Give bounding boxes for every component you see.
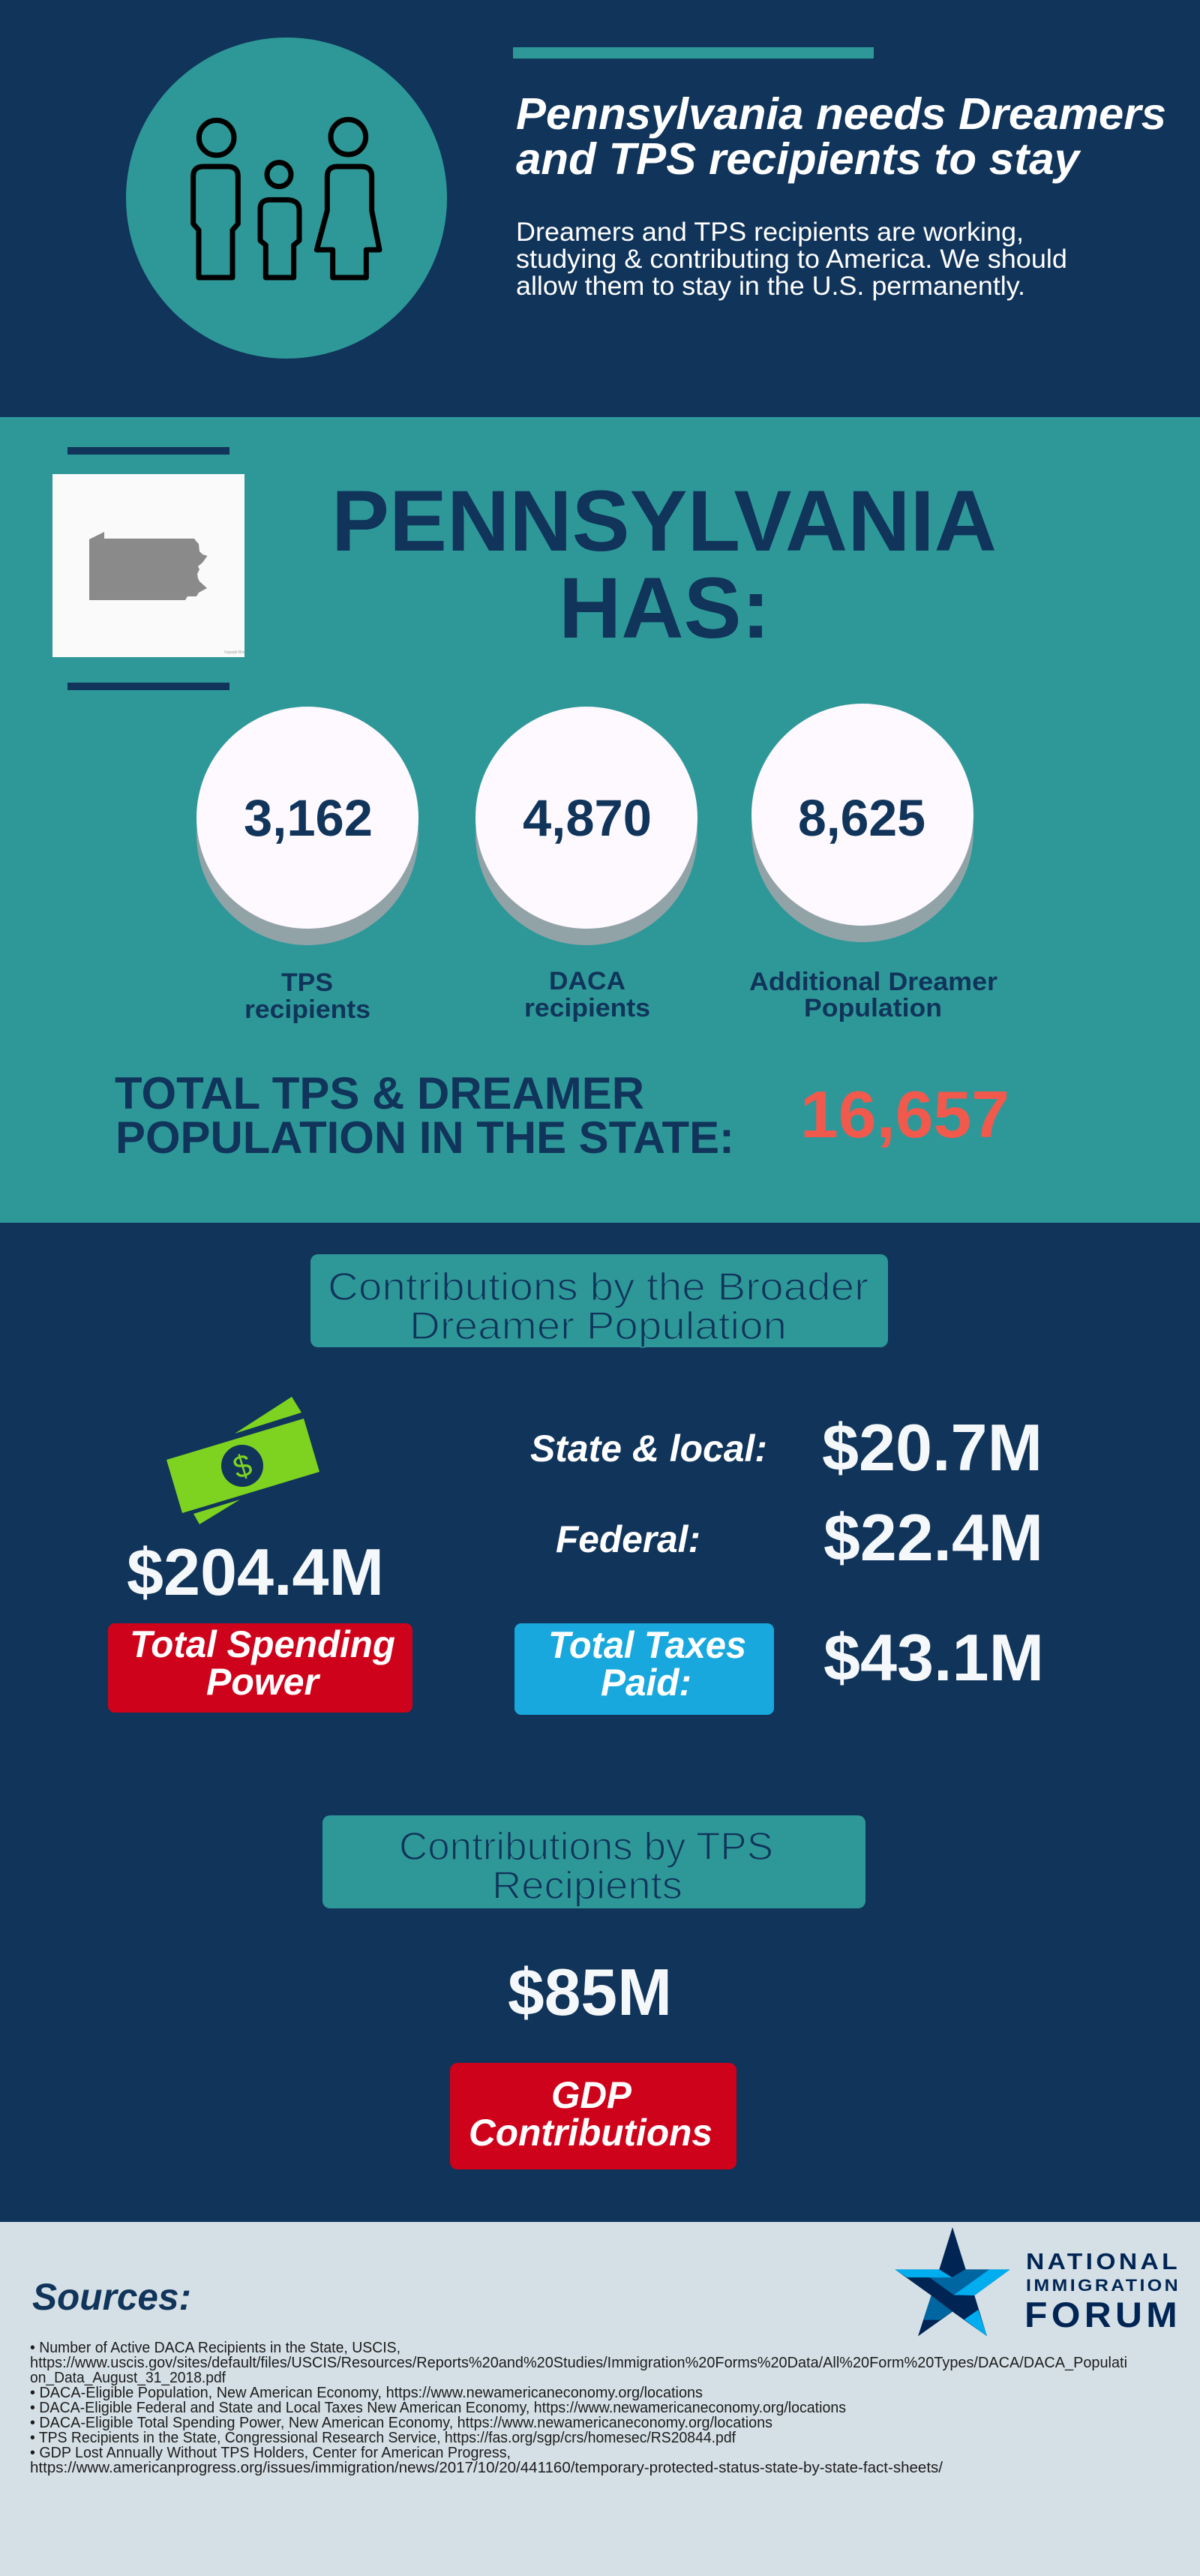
stat: total taxes paid [514, 1620, 1044, 1715]
total population label: POPULATION IN THE STATE: [116, 1112, 734, 1163]
stat: federal taxes [556, 1500, 1043, 1575]
logo: National Immigration Forum: NATIONAL [1026, 2248, 1180, 2274]
stat: GDP contributions value: $85M [508, 1955, 672, 2029]
callout: GDP contributions: Contributions [469, 2112, 712, 2154]
stat: total spending power [108, 1535, 412, 1713]
intro text: allow them to stay in the U.S. permanently. [516, 272, 1025, 301]
icon: money bills [166, 1397, 320, 1524]
stat: DACA recipients: recipients [524, 994, 650, 1022]
panel: Pennsylvania population [0, 417, 1200, 1223]
intro text [516, 218, 1067, 301]
icon: money bills: $ [229, 1447, 256, 1485]
icon: Pennsylvania state map [52, 474, 244, 657]
text block: source list: • GDP Lost Annually Without TPS Holders, Center for American Progress, [30, 2445, 511, 2461]
stat: DACA recipients [476, 707, 698, 1022]
text block: source list: • DACA-Eligible Federal and State and Local Taxes New American Economy, https://www.newamericaneconomy.org/locations [30, 2400, 846, 2416]
total population number: 16,657 [800, 1077, 1010, 1151]
heading: Pennsylvania has: HAS: [559, 560, 770, 656]
text block: source list: on_Data_August_31_2018.pdf [30, 2370, 226, 2386]
stat: DACA recipients: 4,870 [523, 789, 652, 847]
intro text: studying & contributing to America. We should [516, 245, 1067, 274]
stat: total taxes paid: $43.1M [824, 1620, 1044, 1695]
stat: total spending power: Total Spending [130, 1623, 395, 1665]
text block: source list [30, 2340, 1127, 2476]
stat: state and local taxes: $20.7M [822, 1410, 1042, 1485]
text block: source list: • DACA-Eligible Total Spending Power, New American Economy, https://www.newamericaneconomy.org/locations [30, 2415, 772, 2431]
panel: contributions [0, 1223, 1200, 2222]
stat: state and local taxes [530, 1410, 1042, 1485]
heading: contributions by the broader Dreamer population [310, 1254, 888, 1348]
stat: total taxes paid: Total Taxes [548, 1624, 746, 1666]
text block: source list: • Number of Active DACA Recipients in the State, USCIS, [30, 2340, 400, 2356]
heading: contributions by TPS recipients: Contributions by TPS [399, 1825, 773, 1869]
intro text: Dreamers and TPS recipients are working, [516, 218, 1024, 247]
heading: contributions by TPS recipients: Recipients [492, 1864, 682, 1908]
total population label: TOTAL TPS & DREAMER [115, 1068, 644, 1118]
stat: additional Dreamer population: Additional Dreamer [749, 968, 998, 996]
text block: source list: https://www.uscis.gov/sites/default/files/USCIS/Resources/Reports%20and%20Studies/Immigration%20Forms%20Data/All%20Form%20Types/DACA/DACA_Populati [30, 2355, 1127, 2371]
stat: TPS recipients: TPS [281, 968, 333, 997]
text block: source list: • TPS Recipients in the State, Congressional Research Service, https://fas.org/sgp/crs/homesec/RS20844.pdf [30, 2430, 736, 2446]
heading: contributions by TPS recipients [322, 1815, 866, 1908]
callout: GDP contributions: GDP [551, 2074, 632, 2116]
stat: TPS recipients: 3,162 [244, 789, 373, 847]
title: and TPS recipients to stay [516, 134, 1082, 184]
icon: Pennsylvania state map: Copyright ©Fre [224, 650, 244, 655]
stat: state and local taxes: State & local: [530, 1428, 767, 1470]
logo: National Immigration Forum: IMMIGRATION [1026, 2276, 1180, 2295]
stat: total spending power: $204.4M [127, 1535, 384, 1609]
icon: family in teal circle [126, 38, 447, 359]
panel: sources [0, 2222, 1200, 2576]
text block: source list: • DACA-Eligible Population, New American Economy, https://www.newamericaneconomy.org/locations [30, 2385, 703, 2401]
panel: hero header [0, 0, 1200, 417]
total population label [115, 1068, 734, 1163]
heading: Pennsylvania has [332, 473, 997, 656]
heading: Pennsylvania has: PENNSYLVANIA [332, 473, 997, 569]
heading: sources: Sources: [32, 2276, 191, 2318]
stat: TPS recipients [196, 707, 418, 1024]
logo: National Immigration Forum: FORUM [1024, 2295, 1181, 2334]
callout: GDP contributions [450, 2063, 736, 2169]
stat: federal taxes: Federal: [556, 1518, 700, 1560]
heading: contributions by the broader Dreamer population: Dreamer Population [410, 1305, 787, 1348]
stat: federal taxes: $22.4M [824, 1500, 1043, 1575]
stat: TPS recipients: recipients [244, 995, 370, 1024]
heading: contributions by the broader Dreamer population: Contributions by the Broader [328, 1265, 868, 1309]
text block: source list: https://www.americanprogress.org/issues/immigration/news/2017/10/20/441160/temporary-protected-status-state-by-state-fact-sheets/ [30, 2460, 943, 2476]
logo: National Immigration Forum [895, 2227, 1181, 2336]
stat: DACA recipients: DACA [549, 967, 626, 995]
title: Pennsylvania needs Dreamers [516, 89, 1166, 139]
stat: additional Dreamer population: Population [804, 994, 942, 1022]
stat: additional Dreamer population [749, 704, 998, 1022]
title [516, 89, 1166, 184]
stat: total spending power: Power [206, 1661, 321, 1703]
stat: total taxes paid: Paid: [601, 1662, 692, 1704]
stat: additional Dreamer population: 8,625 [798, 789, 926, 847]
